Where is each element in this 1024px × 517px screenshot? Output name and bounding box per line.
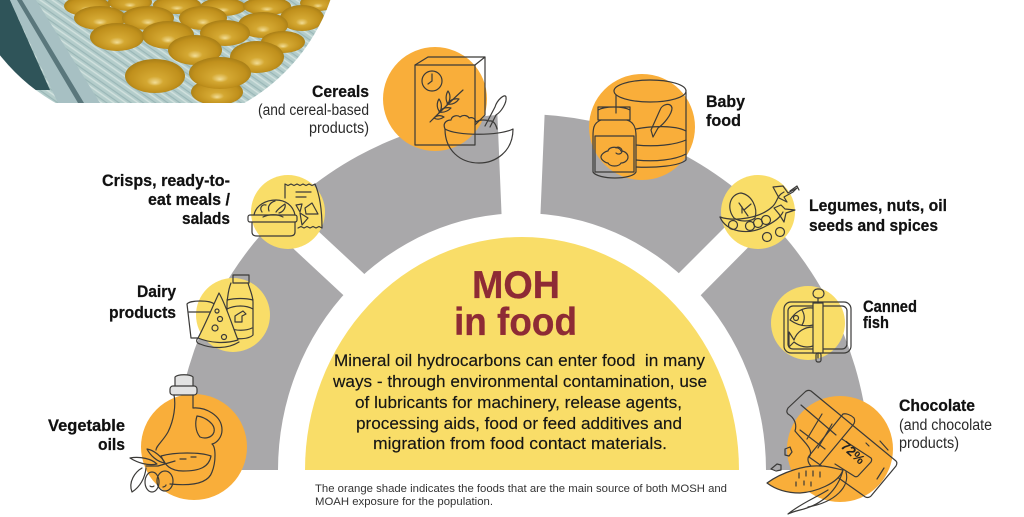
description text: ways - through environmental contamination, use bbox=[332, 373, 707, 391]
label: cereals: Cereals bbox=[312, 82, 369, 101]
icon: pea pod and leaf bbox=[720, 186, 799, 242]
footnote: The orange shade indicates the foods that are the main source of both MOSH and bbox=[315, 483, 727, 495]
icon: cereal box and bowl bbox=[415, 57, 513, 163]
label: cereals: products) bbox=[309, 120, 369, 137]
icon: salad box and crisps bag bbox=[248, 184, 322, 236]
icon: glass, cheese and bottle bbox=[187, 275, 253, 348]
footnote bbox=[315, 483, 727, 508]
item: crisps and ready meals bbox=[248, 175, 325, 249]
label: chocolate bbox=[899, 396, 992, 452]
label: canned fish: fish bbox=[863, 313, 889, 332]
item: vegetable oils bbox=[130, 375, 247, 500]
label: cereals: (and cereal-based bbox=[258, 102, 369, 119]
label: cereals bbox=[258, 82, 369, 137]
description text: of lubricants for machinery, release agents, bbox=[355, 394, 682, 412]
label: baby food: food bbox=[706, 111, 741, 130]
label: crisps bbox=[102, 171, 230, 228]
grey arc segments bbox=[174, 105, 870, 470]
description text bbox=[332, 352, 707, 453]
label: crisps: eat meals / bbox=[148, 190, 230, 209]
label: legumes: seeds and spices bbox=[809, 216, 938, 235]
label: canned fish bbox=[863, 297, 917, 332]
item: cereals bbox=[383, 47, 513, 163]
item: legumes bbox=[720, 175, 799, 249]
label: canned fish: Canned bbox=[863, 297, 917, 316]
label: legumes bbox=[809, 196, 947, 235]
icon: sardine tin bbox=[784, 289, 851, 362]
title: in food bbox=[454, 301, 577, 344]
photo: food on conveyor belt bbox=[0, 0, 330, 103]
icon: oil jug and olives bbox=[130, 375, 222, 492]
label: chocolate: (and chocolate bbox=[899, 417, 992, 434]
label: baby food: Baby bbox=[706, 92, 746, 111]
label: chocolate: Chocolate bbox=[899, 396, 975, 415]
label: vegetable oils bbox=[48, 416, 125, 454]
central yellow semicircle bbox=[305, 237, 739, 470]
label: legumes: Legumes, nuts, oil bbox=[809, 196, 947, 215]
label: baby food bbox=[706, 92, 746, 130]
item: dairy bbox=[187, 275, 270, 352]
label: dairy: products bbox=[109, 303, 176, 322]
label: vegetable oils: oils bbox=[98, 435, 125, 454]
item: chocolate bbox=[767, 390, 897, 514]
footnote: MOAH exposure for the population. bbox=[315, 496, 493, 508]
label: crisps: Crisps, ready-to- bbox=[102, 171, 230, 190]
icon: chocolate bar and cacao pod: 72% bbox=[838, 438, 868, 468]
item: baby food bbox=[589, 74, 695, 180]
description text: Mineral oil hydrocarbons can enter food in many bbox=[334, 352, 706, 370]
label: chocolate: products) bbox=[899, 435, 959, 452]
item: canned fish bbox=[771, 286, 851, 362]
label: dairy bbox=[109, 282, 176, 322]
title bbox=[454, 264, 577, 344]
icon: baby food jars bbox=[593, 80, 686, 178]
title: MOH bbox=[472, 264, 560, 307]
label: vegetable oils: Vegetable bbox=[48, 416, 125, 435]
description text: processing aids, food or feed additives and bbox=[356, 415, 682, 433]
label: dairy: Dairy bbox=[137, 282, 176, 301]
label: crisps: salads bbox=[182, 209, 230, 228]
description text: migration from food contact materials. bbox=[373, 435, 667, 453]
